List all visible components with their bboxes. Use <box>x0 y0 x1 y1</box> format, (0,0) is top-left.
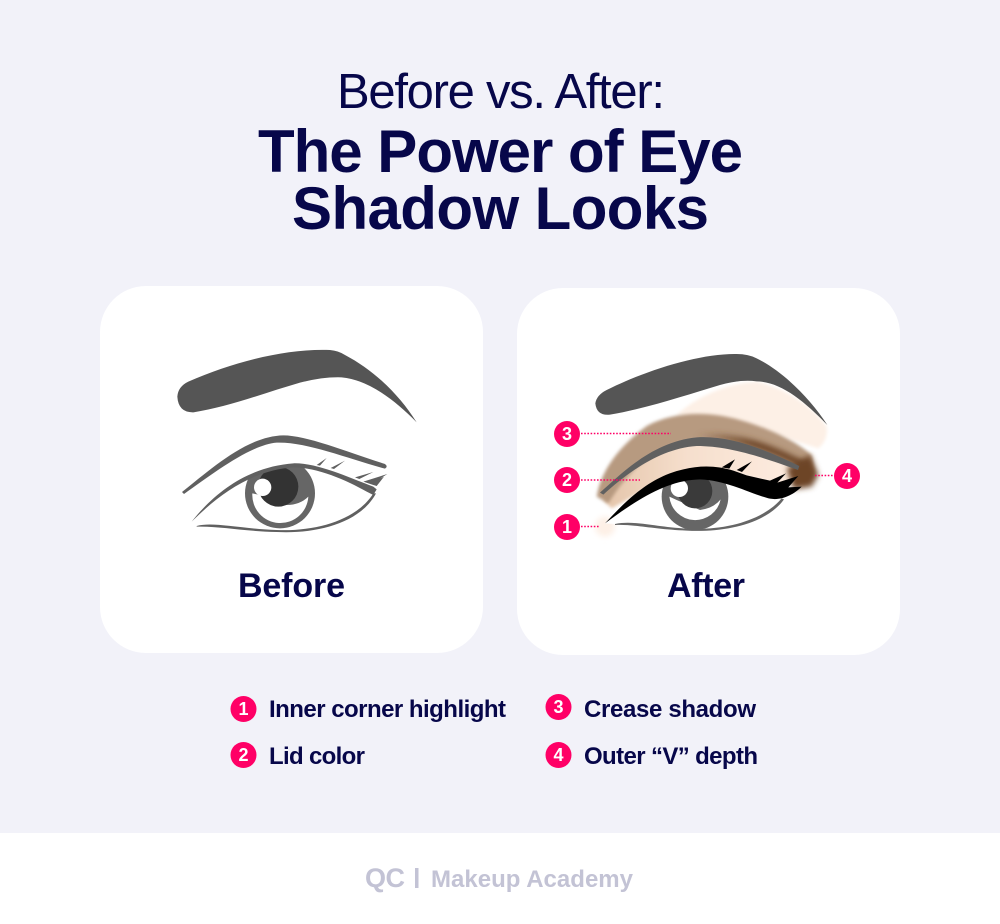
legend: 1 <box>238 699 249 719</box>
title: The Power of Eye <box>258 118 743 185</box>
footer: QC <box>365 863 405 893</box>
crease shadow <box>597 414 815 503</box>
label: after: After <box>667 567 745 605</box>
inner corner highlight <box>595 517 615 537</box>
title <box>258 65 743 242</box>
callout markers: 3 <box>562 424 572 444</box>
illustration: bare eye <box>177 350 417 532</box>
highlight under brow <box>677 382 827 448</box>
footer: Makeup Academy <box>431 866 634 893</box>
legend: Crease shadow <box>584 696 756 723</box>
eyeball <box>605 479 728 529</box>
legend: 2 <box>238 745 249 765</box>
legend <box>230 694 758 770</box>
illustration: eye with shadow <box>595 354 827 537</box>
legend: 3 <box>553 697 564 717</box>
legend: Inner corner highlight <box>269 696 506 723</box>
callout markers: 4 <box>842 466 852 486</box>
label: before: Before <box>238 567 345 605</box>
callout markers: 2 <box>562 470 572 490</box>
eyebrow <box>595 354 827 425</box>
crease line <box>600 437 799 495</box>
lid color <box>603 440 797 508</box>
outer V <box>787 455 818 489</box>
lower lid <box>615 498 784 531</box>
footer <box>0 833 1000 924</box>
legend: Outer “V” depth <box>584 743 758 770</box>
legend: Lid color <box>269 743 365 770</box>
panel: before <box>100 286 483 653</box>
panel: after <box>517 288 900 655</box>
title: Shadow Looks <box>292 175 709 242</box>
callout markers <box>554 421 860 540</box>
legend: 4 <box>553 745 564 765</box>
callout markers: 1 <box>562 517 572 537</box>
eyeliner <box>605 466 802 523</box>
title: Before vs. After: <box>337 65 665 119</box>
